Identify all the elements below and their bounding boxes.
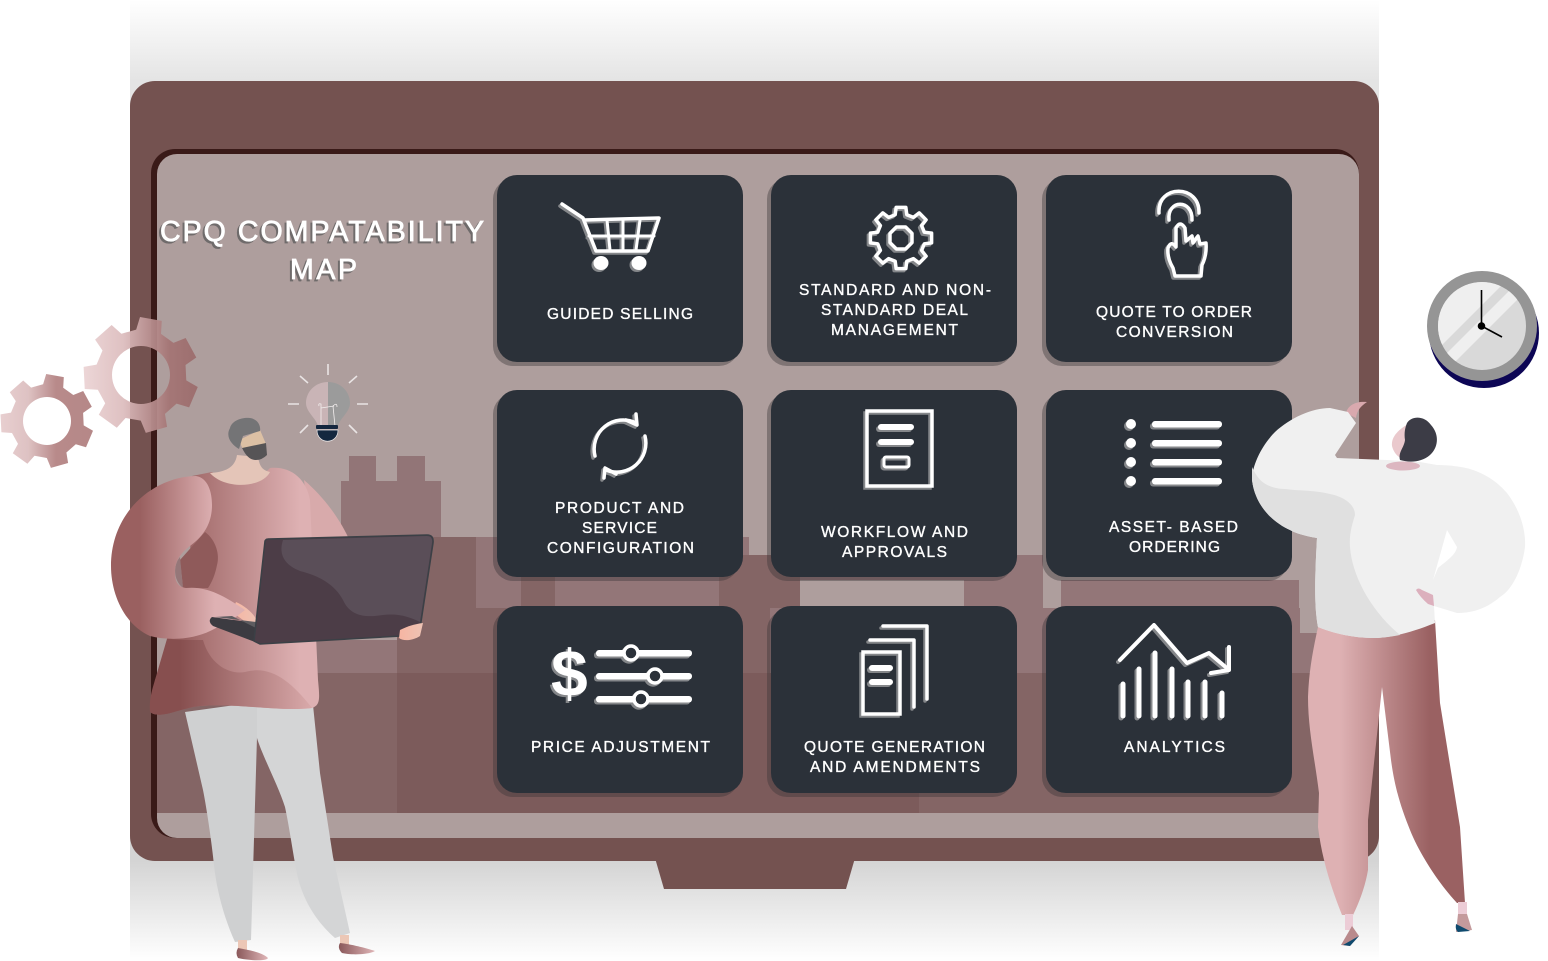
ankles and shoes [236, 935, 375, 960]
hair [228, 418, 260, 449]
title: CPQ COMPATABILITY [160, 216, 484, 248]
panel: deal management [767, 175, 1017, 366]
icon: light bulb [288, 364, 368, 441]
face [1392, 424, 1418, 460]
torso shadow [180, 532, 218, 588]
card shadow [1042, 179, 1288, 366]
icon: document [867, 411, 932, 486]
socks and shoes [1341, 902, 1472, 946]
monitor frame [130, 81, 1379, 861]
monitor screen [157, 154, 1359, 838]
card [1046, 390, 1292, 577]
card shadow [493, 179, 739, 366]
person right: looking at clock [1252, 402, 1525, 946]
icon: trend chart [1120, 625, 1229, 716]
label: APPROVALS [842, 544, 947, 561]
card [1046, 606, 1292, 793]
city silhouette [157, 456, 1359, 813]
card shadow [767, 394, 1013, 581]
panel: analytics [1042, 606, 1292, 797]
card shadow [767, 610, 1013, 797]
label: MANAGEMENT [831, 322, 959, 339]
gap under arm [175, 557, 183, 588]
card [497, 606, 743, 793]
icon: shopping cart [562, 204, 659, 270]
trousers [1308, 620, 1465, 915]
panel: asset based ordering [1042, 390, 1292, 581]
hand on keyboard [232, 602, 257, 628]
panel: product configuration [493, 390, 743, 581]
panel: guided selling [493, 175, 743, 366]
sweater [1252, 408, 1525, 638]
big arm [111, 476, 245, 639]
person left: with laptop [111, 418, 433, 960]
label [1096, 304, 1252, 341]
title [160, 216, 484, 286]
icon: list [1126, 419, 1222, 486]
icon: refresh arrows [594, 414, 646, 478]
label: CONVERSION [1116, 324, 1233, 341]
face [239, 430, 266, 450]
neck [210, 455, 270, 485]
icon: dollar and sliders: $ [551, 636, 588, 710]
card shadow [767, 179, 1013, 366]
collar [1386, 462, 1420, 470]
label: WORKFLOW AND [821, 524, 968, 541]
background fade: bottom [130, 825, 1379, 961]
icon: dollar and sliders [551, 636, 692, 710]
label: QUOTE TO ORDER [1096, 304, 1252, 321]
beard [242, 443, 267, 460]
label [547, 500, 694, 557]
panel: price adjustment [493, 606, 743, 797]
arm gap [1433, 530, 1457, 580]
icon: large gear [84, 317, 198, 433]
laptop screen [254, 535, 433, 644]
label: QUOTE GENERATION [804, 739, 985, 756]
panel: quote to order [1042, 175, 1292, 366]
card shadow [1042, 394, 1288, 581]
hair [1400, 418, 1437, 462]
clock face [1438, 282, 1526, 370]
label: GUIDED SELLING [547, 306, 693, 323]
clock hands [1482, 290, 1502, 337]
label: ASSET- BASED [1109, 519, 1238, 536]
card shadow [493, 610, 739, 797]
dress [150, 468, 319, 715]
keyboard [215, 616, 256, 628]
raised hand [1346, 402, 1367, 418]
card [771, 390, 1017, 577]
card [1046, 175, 1292, 362]
hand on hip [1416, 588, 1434, 606]
card [771, 175, 1017, 362]
title: MAP [290, 254, 357, 286]
background fade: top [130, 0, 1379, 120]
label [1109, 519, 1238, 556]
label [804, 739, 985, 776]
label: SERVICE [582, 520, 657, 537]
label [821, 524, 968, 561]
sweater shade [1252, 467, 1400, 638]
card [497, 390, 743, 577]
card [771, 606, 1017, 793]
card shadow [1042, 610, 1288, 797]
label: ORDERING [1129, 539, 1220, 556]
dress fold [150, 640, 312, 715]
label: PRICE ADJUSTMENT [531, 739, 711, 756]
panel: workflow [767, 390, 1017, 581]
label: PRODUCT AND [555, 500, 684, 517]
label: AND AMENDMENTS [810, 759, 980, 776]
icon: tapping hand [1159, 191, 1206, 276]
clock backing [1429, 278, 1539, 388]
laptop screen highlight [281, 536, 432, 622]
label: STANDARD AND NON- [799, 282, 991, 299]
hand on laptop [399, 623, 423, 640]
clock rim [1427, 271, 1537, 381]
laptop base [210, 617, 262, 644]
card [497, 175, 743, 362]
icon: small gear [0, 374, 93, 468]
label: ANALYTICS [1124, 739, 1225, 756]
label: CONFIGURATION [547, 540, 694, 557]
icon: document stack [863, 626, 927, 714]
legs [185, 702, 257, 942]
card shadow [493, 394, 739, 581]
label [799, 282, 991, 339]
monitor inner shadow edge [151, 149, 1359, 838]
icon: wall clock [1420, 270, 1539, 388]
far sleeve [304, 480, 348, 545]
icon: gear [870, 207, 932, 269]
panel: quote generation [767, 606, 1017, 797]
label: STANDARD DEAL [821, 302, 968, 319]
monitor stand [655, 858, 855, 889]
